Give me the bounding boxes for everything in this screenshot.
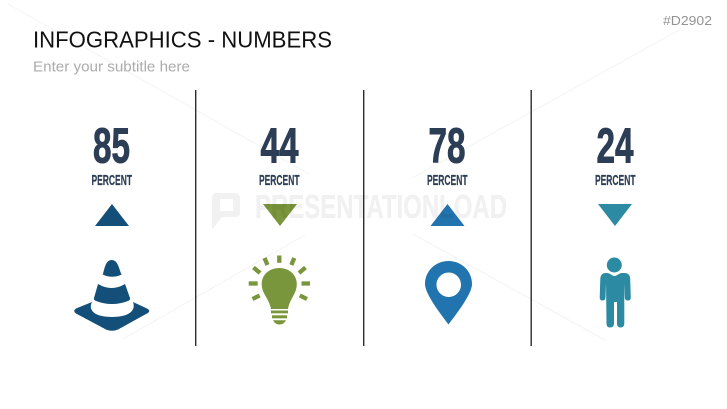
icon: person: [600, 258, 631, 328]
label: PERCENT: [595, 173, 636, 189]
title: INFOGRAPHICS - NUMBERS: [33, 26, 332, 52]
label: PERCENT: [259, 173, 300, 189]
column 1: 85 percent: [74, 120, 149, 331]
column 2: 44 percent: [249, 120, 310, 324]
column dividers: [195, 90, 532, 346]
slide code: #D2902: [663, 14, 712, 28]
arrow up: [430, 204, 464, 226]
icon: map pin: [425, 261, 472, 324]
label: PERCENT: [92, 173, 132, 189]
watermark: [212, 188, 507, 230]
icon: traffic cone: [74, 260, 149, 331]
number: 24: [596, 120, 634, 174]
column 3: 78 percent: [425, 120, 472, 324]
icon: light bulb: [249, 256, 310, 324]
arrow up: [95, 204, 129, 226]
number: 85: [93, 120, 130, 174]
watermark: PRESENTATIONLOAD: [255, 188, 507, 225]
column 4: 24 percent: [595, 120, 636, 328]
number: 78: [428, 120, 466, 174]
number: 44: [260, 120, 298, 174]
label: PERCENT: [427, 173, 468, 189]
arrow down: [263, 204, 297, 226]
subtitle: Enter your subtitle here: [33, 60, 190, 76]
arrow down: [598, 204, 632, 226]
